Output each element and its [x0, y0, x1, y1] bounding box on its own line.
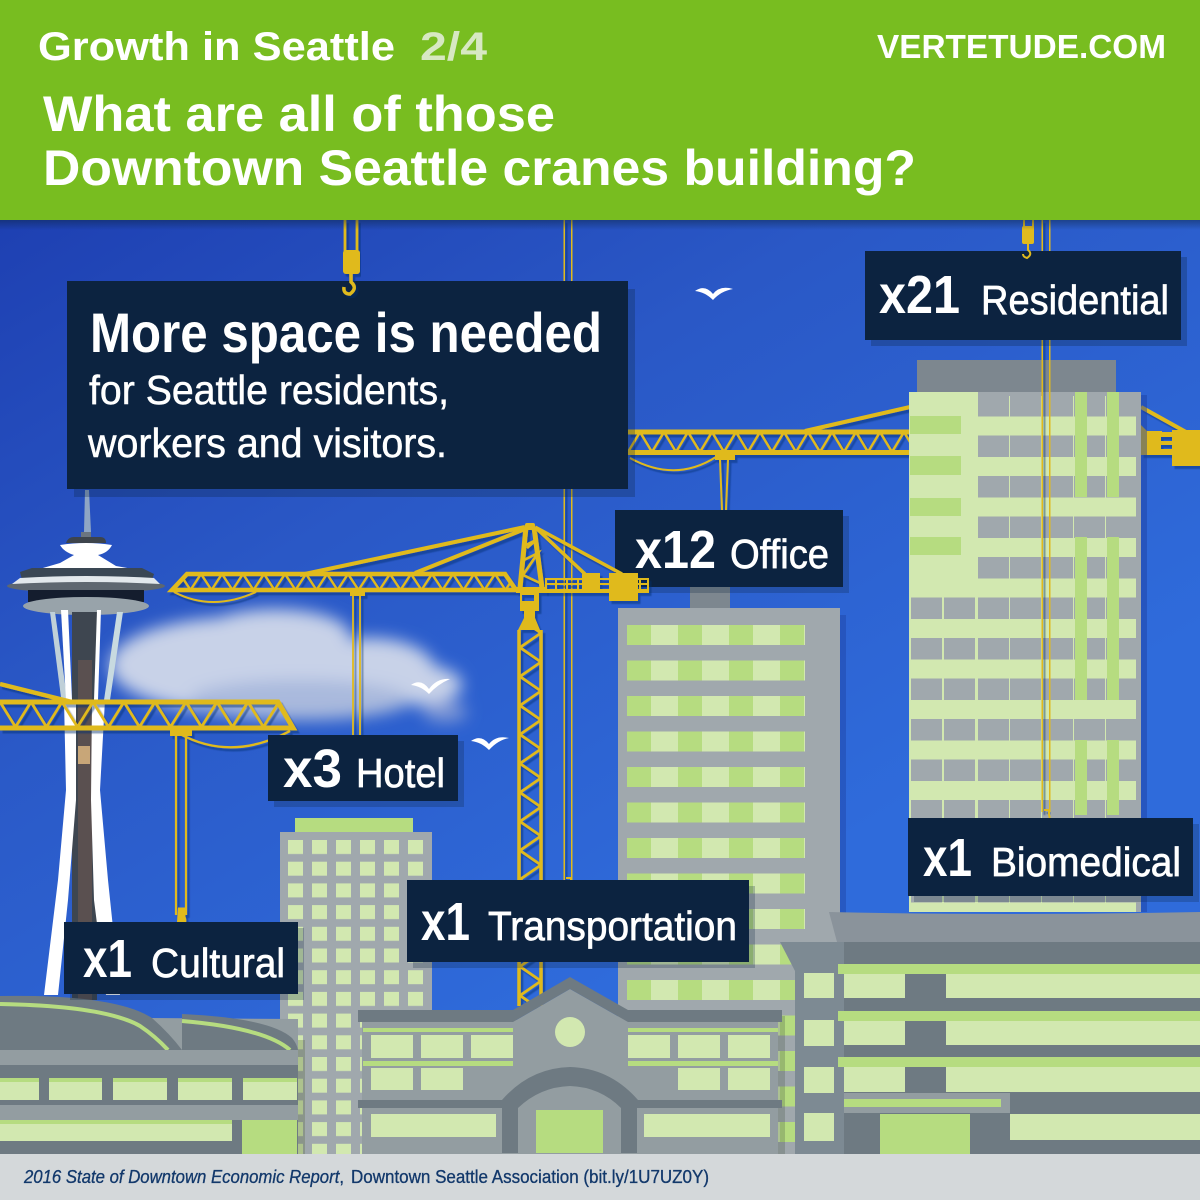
label: x1 Cultural: Cultural — [151, 940, 285, 986]
main title: What are all of those — [43, 86, 555, 142]
label: x3 Hotel — [268, 735, 464, 807]
hotel building — [280, 818, 432, 1155]
bird — [471, 737, 509, 750]
callout: more space is needed — [67, 281, 635, 497]
cloud — [110, 609, 467, 722]
series title: Growth in Seattle — [38, 25, 395, 69]
label: x1 Transportation: x1 — [421, 892, 470, 952]
label: x1 Transportation — [407, 880, 755, 968]
label: x3 Hotel: x3 — [283, 739, 342, 799]
label: x21 Residential — [865, 251, 1187, 346]
label: x1 Biomedical: Biomedical — [991, 839, 1181, 885]
callout: more space is needed: More space is needed — [90, 301, 602, 364]
bird — [695, 288, 733, 300]
label: x3 Hotel: Hotel — [356, 750, 445, 796]
hoist cable to transportation — [564, 220, 572, 887]
residential tower — [909, 360, 1147, 912]
hook above residential label — [1022, 220, 1034, 258]
callout: more space is needed: workers and visitors. — [87, 420, 447, 466]
series number: 2/4 — [420, 25, 488, 69]
hook above callout — [343, 220, 360, 294]
label: x1 Cultural: x1 — [83, 929, 132, 989]
footer source: 2016 State of Downtown Economic Report, — [23, 1167, 344, 1187]
footer source — [0, 1154, 1200, 1200]
label: x1 Biomedical: x1 — [923, 828, 972, 888]
central station building — [358, 977, 785, 1155]
office tower — [618, 580, 846, 1155]
left station building — [0, 996, 305, 1155]
callout: more space is needed: for Seattle residents, — [89, 367, 449, 413]
bird — [411, 679, 450, 694]
sky background — [0, 220, 1200, 1155]
site name: VERTETUDE.COM — [877, 28, 1166, 65]
label: x21 Residential: Residential — [981, 277, 1169, 323]
hoist cable to biomedical — [1042, 220, 1050, 821]
label: x1 Biomedical — [908, 818, 1199, 902]
crane counter-jib over office label — [535, 527, 648, 601]
label: x21 Residential: x21 — [879, 265, 960, 325]
label: x12 Office: x12 — [635, 520, 716, 580]
space needle — [7, 490, 165, 1000]
header panel — [0, 0, 1200, 220]
footer source: Downtown Seattle Association (bit.ly/1U7UZ0Y) — [351, 1167, 709, 1187]
label: x12 Office: Office — [730, 531, 829, 577]
label: x1 Cultural — [64, 922, 304, 1000]
left crane — [0, 684, 293, 926]
main title: Downtown Seattle cranes building? — [43, 140, 916, 196]
header shadow — [0, 220, 1200, 230]
label: x12 Office — [615, 510, 849, 593]
office crane — [628, 407, 1200, 510]
central tower crane — [172, 523, 546, 1006]
biomedical building — [780, 912, 1200, 1154]
label: x1 Transportation: Transportation — [488, 903, 737, 949]
main title — [43, 86, 916, 196]
